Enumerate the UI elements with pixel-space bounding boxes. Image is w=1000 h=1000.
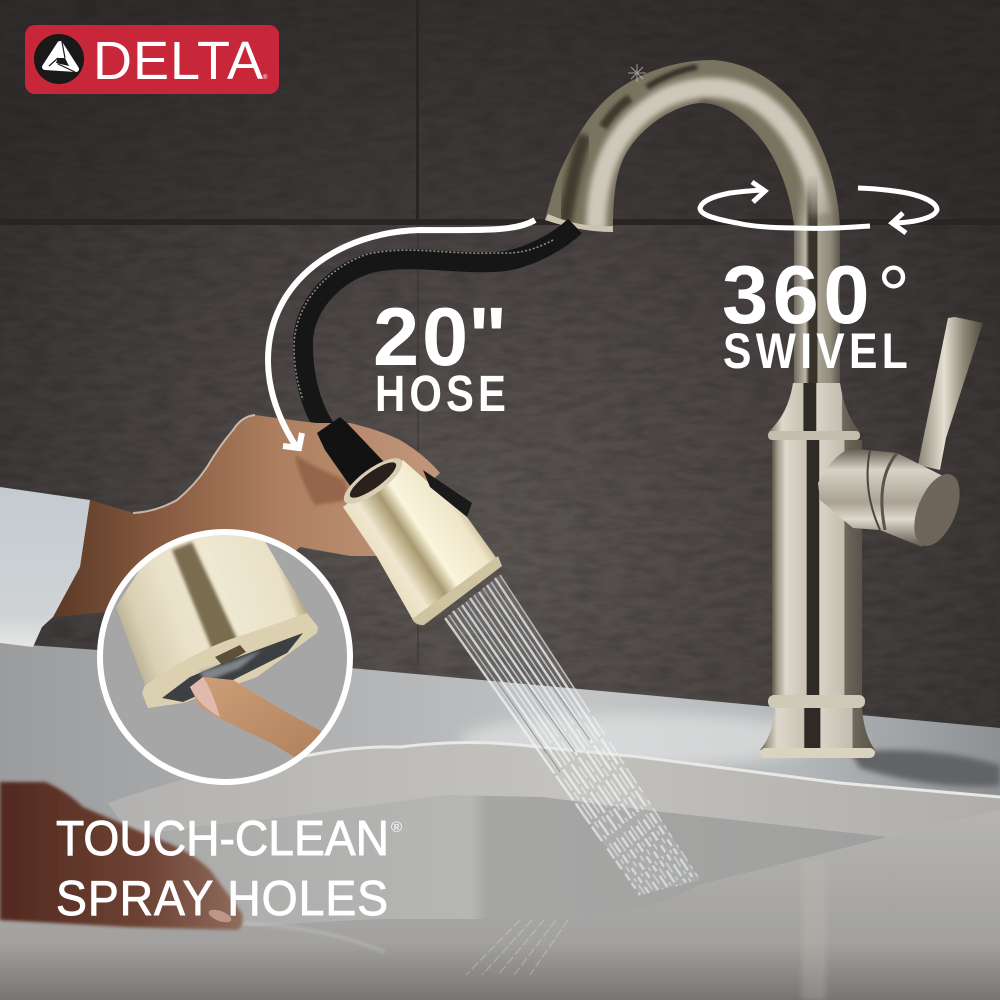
logo: Delta badge <box>25 25 279 94</box>
faucet <box>545 60 983 758</box>
inset circle: touch-clean detail <box>99 530 351 783</box>
registered mark: ® <box>391 819 402 836</box>
neck cone <box>768 383 860 432</box>
label: 20 inch hose <box>373 290 510 422</box>
fingernail <box>207 907 233 925</box>
inset sprayer head <box>116 530 318 708</box>
logo wordmark: DELTA <box>93 31 263 91</box>
shirt cuff <box>0 487 90 647</box>
handle hub <box>818 448 969 552</box>
base ring <box>768 695 865 708</box>
logo registered mark: ® <box>263 74 268 81</box>
main body <box>772 440 862 696</box>
swivel word: SWIVEL <box>723 323 912 379</box>
sprayer collar <box>338 451 408 511</box>
spout and upper column <box>545 60 840 385</box>
inset fingertip <box>190 677 322 757</box>
hose connector <box>317 417 385 490</box>
water spray <box>445 575 700 975</box>
spray button <box>423 470 472 517</box>
label: 360 swivel <box>722 248 915 379</box>
base flare <box>760 708 875 750</box>
sprayer rim <box>412 556 502 625</box>
countertop <box>0 643 1000 1000</box>
second line: SPRAY HOLES <box>56 872 389 926</box>
hose word: HOSE <box>375 365 510 422</box>
braided hose <box>294 226 575 428</box>
wall background <box>0 0 1000 760</box>
sprayer body <box>343 460 500 623</box>
sprayer head <box>317 417 502 625</box>
first line: TOUCH-CLEAN <box>56 812 389 866</box>
lever handle <box>918 317 983 470</box>
label: touch-clean spray holes <box>56 812 402 926</box>
sink basin <box>0 743 1000 1000</box>
20 inch figure: 20" <box>373 290 507 383</box>
arrow: hose length <box>268 220 535 448</box>
hand holding sprayer <box>53 415 440 617</box>
logo mark <box>34 34 84 84</box>
sparkle <box>628 64 646 82</box>
360 degree figure: 360° <box>722 248 915 341</box>
foreground hand on counter <box>0 782 243 930</box>
arrow: swivel <box>700 182 937 233</box>
